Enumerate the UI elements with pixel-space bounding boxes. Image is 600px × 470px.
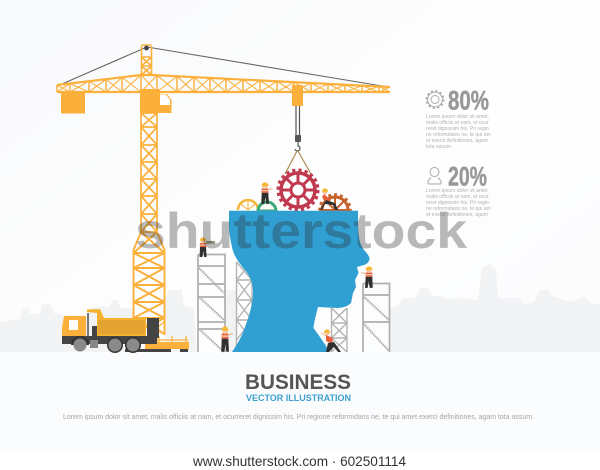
trolley and hook [285,85,311,174]
80% number: 80% [448,86,489,116]
head silhouette [229,211,370,352]
crane cables [62,47,388,87]
scaffold tower behind head left [236,262,252,352]
icon: user [428,168,441,184]
80% description [426,114,491,150]
crane jib [57,75,390,92]
20% description: malis officiis at nam, et ocur [426,194,489,200]
worker on head top left [261,182,273,204]
gear: red [278,170,318,210]
80% description: reret dignissim his. Pri regio [426,126,489,132]
scaffold right [363,284,390,352]
ground [0,352,600,450]
dump truck [62,309,159,353]
gear: yellow [238,200,258,210]
80% description: tota assum. [426,144,452,150]
crane tower top [142,45,152,75]
worker on head top right [320,188,338,210]
icon: gear [426,91,444,108]
worker on right scaffold [361,266,373,288]
gear: orange [320,194,350,226]
crane pivot [144,46,149,50]
gear: green [258,202,276,211]
20% description: reret dignissim his. Pri regio [426,200,489,206]
counterweight [61,91,85,114]
skyline [0,264,600,352]
20% number: 20% [448,162,487,192]
body text: Lorem ipsum dolor sit amet, malis officiis at nam, et ocurreret dignissim his. Pri regione reformidans ne, te qui amet exerci definitiones, agam tota assum. [63,412,534,421]
stat: 20% [426,162,491,218]
footer url: www.shutterstock.com · 602501114 [192,453,406,469]
workers [200,182,373,352]
80% description: Lorem ipsum dolor sit amet, [426,114,489,120]
subtitle: VECTOR ILLUSTRATION [246,393,351,404]
scaffold left [198,254,225,352]
20% description: et exerci definitiones, agam [426,212,488,218]
20% description: ne reformidans ne, te qui am [426,206,491,212]
80% description: malis officiis at nam, et ocur [426,120,489,126]
scaffold tower behind head right [332,308,347,352]
crane cab [140,89,172,113]
worker pushing head [321,329,341,352]
crane mast lower [134,232,164,335]
20% description: Lorem ipsum dolor sit amet, [426,188,489,194]
tower crane [57,45,390,335]
80% description: ne reformidans ne, te qui am [426,132,491,138]
worker at base left [221,326,233,352]
worker on left scaffold [200,237,215,257]
80% description: et exerci definitiones, agam [426,138,488,144]
stat: 80% [426,86,491,150]
20% description [426,188,491,218]
watermark: shutterstock [135,203,467,259]
title: BUSINESS [245,371,351,394]
crane base [125,322,189,352]
crane mast upper [141,113,157,232]
